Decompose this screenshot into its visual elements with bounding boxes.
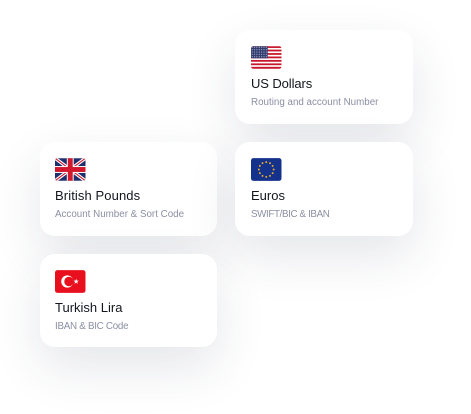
panel: British Pounds card	[40, 142, 217, 236]
text: British Pounds details: Account Number & Sort Code	[55, 208, 184, 220]
panel: Turkish Lira card	[40, 254, 217, 347]
heading: Euros: Euros	[251, 188, 285, 203]
heading: Turkish Lira: Turkish Lira	[55, 300, 122, 315]
icon: US flag	[251, 46, 282, 69]
panel: Euros card	[235, 142, 413, 236]
text: Turkish Lira details: IBAN & BIC Code	[55, 320, 128, 332]
icon: Turkish flag	[55, 270, 86, 293]
text: US Dollars details: Routing and account Number	[251, 96, 378, 108]
icon: EU flag	[251, 158, 282, 181]
icon: UK flag	[55, 158, 86, 181]
heading: US Dollars: US Dollars	[251, 76, 312, 91]
panel: US Dollars card	[235, 30, 413, 124]
heading: British Pounds: British Pounds	[55, 188, 140, 203]
text: Euros details: SWIFT/BIC & IBAN	[251, 208, 329, 220]
